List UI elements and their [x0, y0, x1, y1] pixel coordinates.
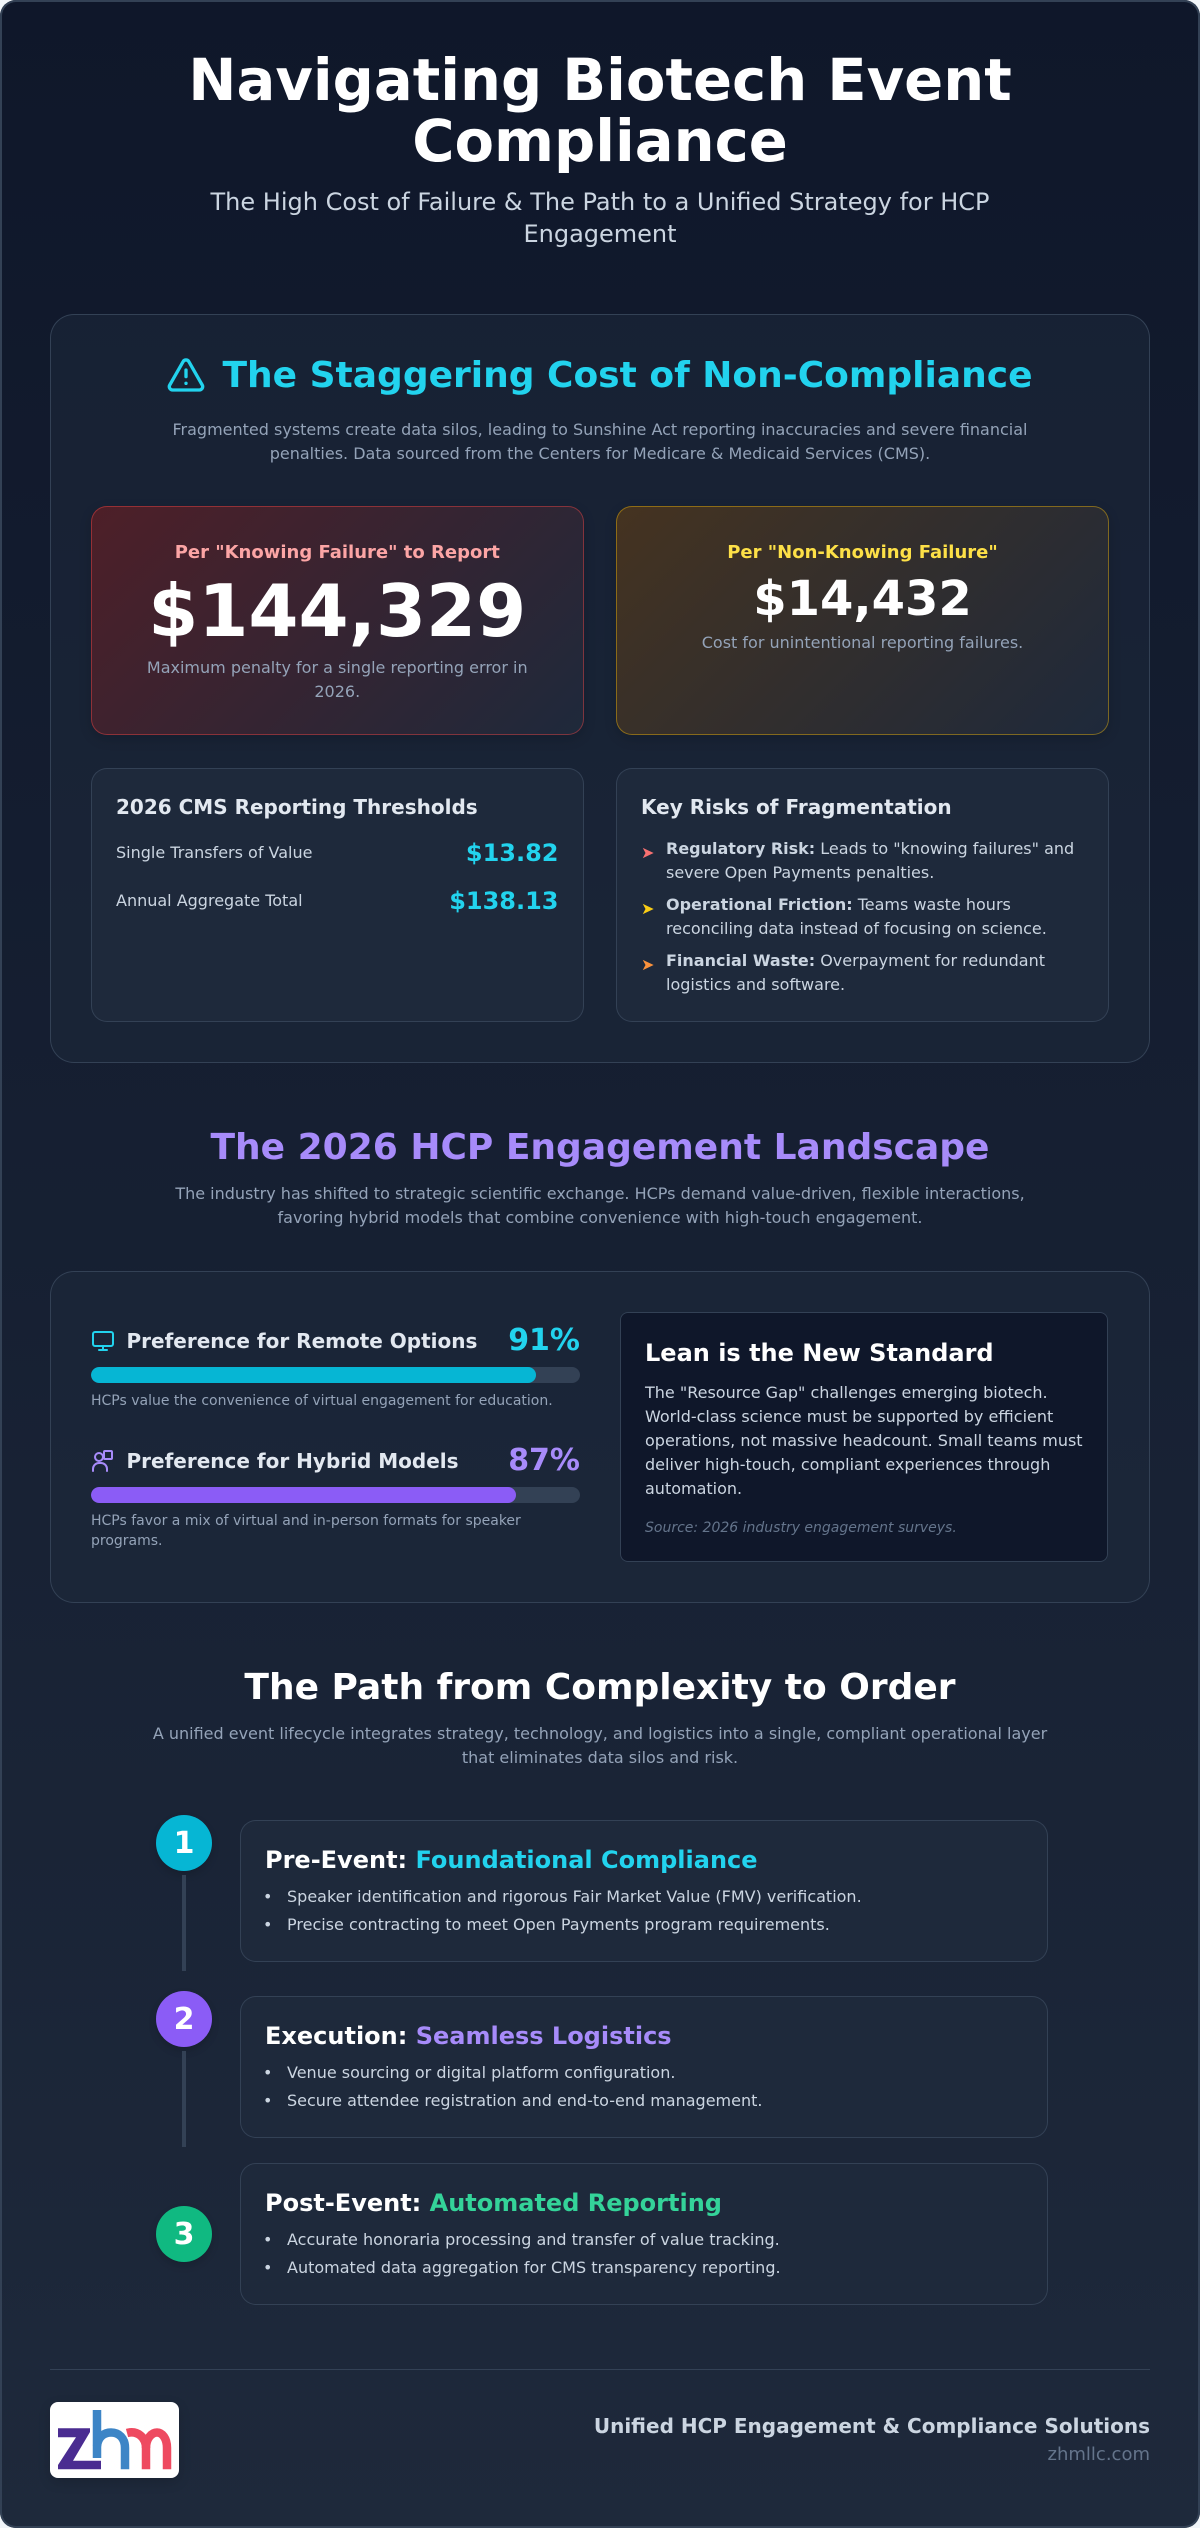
callout text: operations, not massive headcount. Small teams must: [645, 1431, 1083, 1450]
step 1 number: 1: [174, 1826, 194, 1861]
step 2 number: [156, 1991, 212, 2047]
step details: Venue sourcing or digital platform configuration.: [287, 2063, 675, 2082]
title: [188, 47, 1012, 174]
icon: arrow: ➤: [641, 899, 654, 918]
subtitle: [210, 188, 989, 248]
penalty value: $14,432: [753, 571, 972, 627]
metric title: Preference for Remote Options: [126, 1329, 477, 1353]
panel: engagement landscape: [50, 1271, 1150, 1603]
step title: Post-Event: Automated Reporting: [265, 2189, 722, 2217]
step details: [287, 2230, 781, 2277]
icon: warning triangle: [168, 358, 204, 392]
step title: Pre-Event: Foundational Compliance: [265, 1846, 758, 1874]
callout text: [644, 1383, 1083, 1498]
title: Compliance: [412, 108, 788, 174]
connector 1-2: [182, 1875, 186, 1971]
footer tagline: Unified HCP Engagement & Compliance Solutions: [594, 2414, 1150, 2438]
step title: Execution: Seamless Logistics: [265, 2022, 672, 2050]
bullets: [263, 2230, 272, 2277]
label: Per "Knowing Failure" to Report: [175, 542, 500, 563]
risk item: Operational Friction: Teams waste hours: [666, 895, 1011, 914]
description: 2026.: [314, 682, 360, 700]
subtitle: The High Cost of Failure & The Path to a Unified Strategy for HCP: [211, 188, 989, 216]
bullets: [263, 2063, 272, 2110]
bullets: •: [263, 2091, 272, 2110]
description: [147, 658, 528, 700]
description: Maximum penalty for a single reporting error in: [147, 658, 528, 676]
progress bar: 87%: [91, 1487, 580, 1503]
risk item: Financial Waste: Overpayment for redundant: [666, 951, 1045, 970]
bullets: •: [263, 1915, 272, 1934]
metric value: 87%: [508, 1443, 580, 1478]
bullets: [263, 1887, 272, 1934]
callout text: automation.: [645, 1479, 742, 1498]
risk item: logistics and software.: [666, 975, 845, 994]
label: Per "Non-Knowing Failure": [727, 542, 998, 563]
callout heading: Lean is the New Standard: [645, 1339, 994, 1367]
metric note: programs.: [91, 1533, 163, 1549]
risk item: [666, 839, 1074, 882]
callout text: The "Resource Gap" challenges emerging biotech.: [645, 1383, 1048, 1402]
callout text: World-class science must be supported by efficient: [645, 1407, 1053, 1426]
card: key risks: [616, 768, 1109, 1022]
intro text: A unified event lifecycle integrates strategy, technology, and logistics into a single, compliant operational layer: [153, 1724, 1047, 1743]
step 2 card: [240, 1996, 1048, 2138]
card: knowing failure penalty: [91, 506, 584, 735]
intro text: [153, 1724, 1048, 1767]
step 1 number: [156, 1815, 212, 1871]
bullets: •: [263, 2258, 272, 2277]
metric value: 91%: [508, 1323, 580, 1358]
icon: hybrid people: [92, 1450, 113, 1472]
intro text: [172, 420, 1027, 463]
intro text: Fragmented systems create data silos, leading to Sunshine Act reporting inaccuracies and severe financial: [172, 420, 1027, 439]
step 3 number: [156, 2206, 212, 2262]
connector 2-3: [182, 2051, 186, 2147]
icon: arrow: ➤: [641, 843, 654, 862]
penalty value: $144,329: [148, 569, 526, 653]
subtitle: Engagement: [523, 220, 677, 248]
heading: engagement landscape: The 2026 HCP Engagement Landscape: [210, 1127, 989, 1168]
source note: Source: 2026 industry engagement surveys.: [645, 1520, 957, 1536]
description: Cost for unintentional reporting failures.: [702, 633, 1023, 652]
icon: monitor: [92, 1331, 114, 1351]
card: reporting thresholds: [91, 768, 584, 1022]
step details: [287, 1887, 862, 1934]
heading: cost of non-compliance: The Staggering Cost of Non-Compliance: [222, 354, 1033, 396]
bullets: •: [263, 1887, 272, 1906]
bullets: •: [263, 2063, 272, 2082]
bullets: •: [263, 2230, 272, 2249]
intro text: favoring hybrid models that combine convenience with high-touch engagement.: [278, 1208, 922, 1227]
step 3 number: 3: [174, 2217, 194, 2252]
card: non-knowing failure penalty: [616, 506, 1109, 735]
intro text: The industry has shifted to strategic scientific exchange. HCPs demand value-driven, flexible interactions,: [175, 1184, 1025, 1203]
step 3 card: [240, 2163, 1048, 2305]
metric note: HCPs favor a mix of virtual and in-person formats for speaker: [91, 1513, 521, 1529]
metric note: HCPs value the convenience of virtual engagement for education.: [91, 1393, 553, 1409]
step details: Speaker identification and rigorous Fair Market Value (FMV) verification.: [287, 1887, 862, 1906]
callout text: deliver high-touch, compliant experiences through: [645, 1455, 1050, 1474]
intro text: penalties. Data sourced from the Centers for Medicare & Medicaid Services (CMS).: [270, 444, 930, 463]
footer website: zhmllc.com: [1048, 2444, 1150, 2465]
metric title: Preference for Hybrid Models: [126, 1449, 459, 1473]
heading: path to order: The Path from Complexity to Order: [244, 1667, 956, 1708]
step details: [287, 2063, 762, 2110]
risk item: [666, 895, 1047, 938]
title: Navigating Biotech Event: [188, 47, 1012, 114]
card heading: Key Risks of Fragmentation: [641, 795, 952, 819]
panel: cost of non-compliance: [50, 314, 1150, 1063]
threshold value: $138.13: [449, 887, 558, 915]
risk item: severe Open Payments penalties.: [666, 863, 934, 882]
step 1 card: [240, 1820, 1048, 1962]
logo: zhm: [50, 2402, 179, 2478]
risk item: Regulatory Risk: Leads to "knowing failures" and: [666, 839, 1074, 858]
risk item: reconciling data instead of focusing on science.: [666, 919, 1047, 938]
step details: Accurate honoraria processing and transfer of value tracking.: [287, 2230, 780, 2249]
threshold label: Single Transfers of Value: [116, 842, 312, 862]
card heading: 2026 CMS Reporting Thresholds: [116, 795, 478, 819]
metric note: [91, 1513, 521, 1549]
progress bar: 91%: [91, 1367, 580, 1383]
step details: Precise contracting to meet Open Payments program requirements.: [287, 1915, 830, 1934]
step details: Secure attendee registration and end-to-end management.: [287, 2091, 762, 2110]
intro text: that eliminates data silos and risk.: [462, 1748, 738, 1767]
icon: arrow: ➤: [641, 955, 654, 974]
intro text: [175, 1184, 1025, 1227]
step 2 number: 2: [174, 2002, 194, 2037]
threshold value: $13.82: [466, 839, 558, 867]
step details: Automated data aggregation for CMS transparency reporting.: [287, 2258, 781, 2277]
risk item: [666, 951, 1045, 994]
threshold label: Annual Aggregate Total: [116, 890, 303, 910]
callout: lean standard: [620, 1312, 1108, 1562]
